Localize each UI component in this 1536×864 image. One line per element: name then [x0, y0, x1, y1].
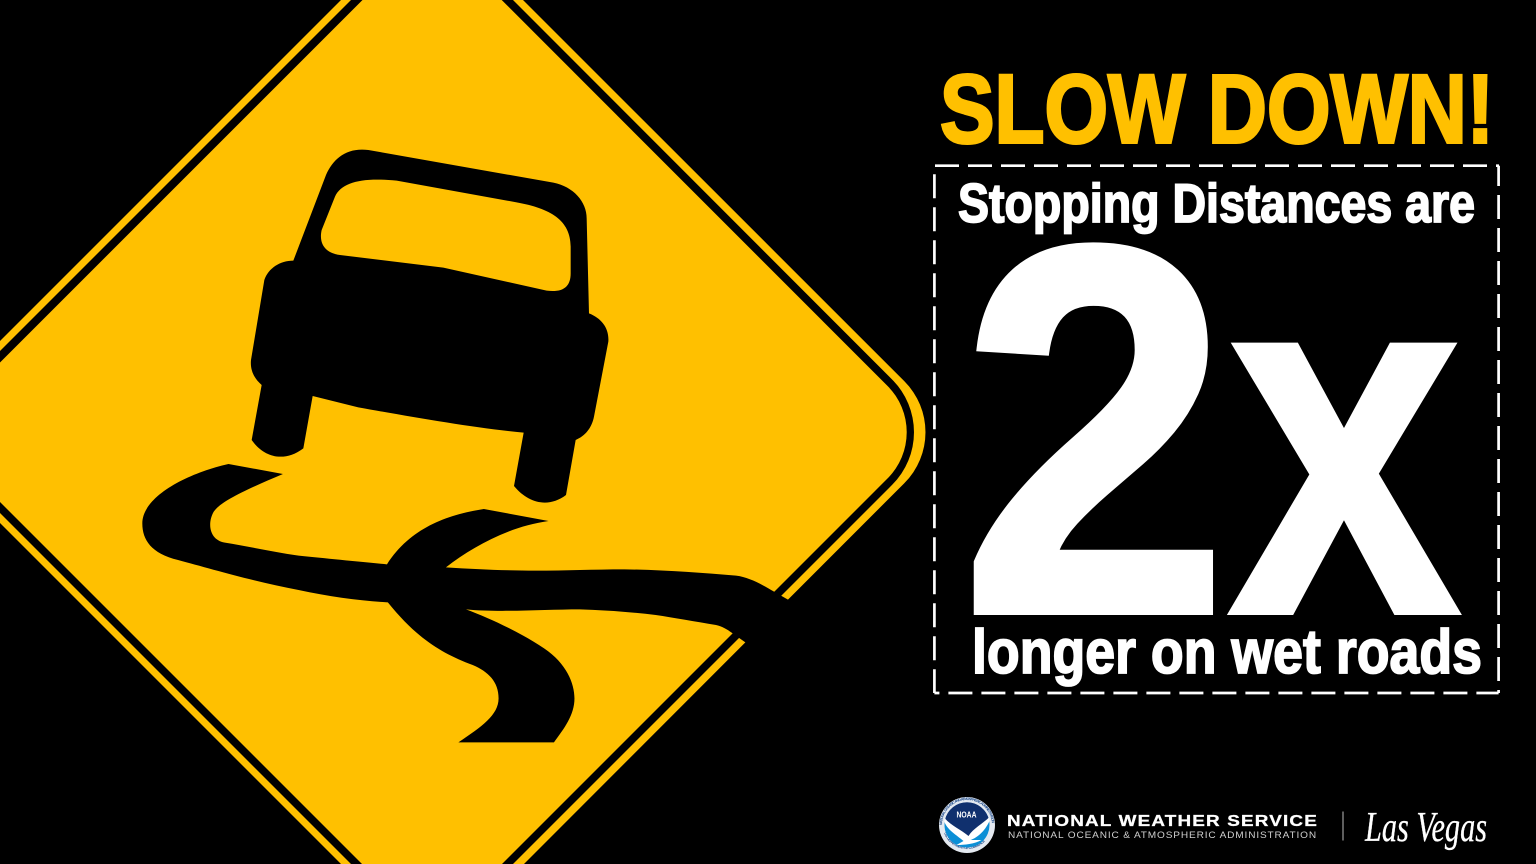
icon: NOAA seal: [939, 797, 995, 853]
icon: NOAA seal: U.S. DEPARTMENT OF COMMERCE: [944, 832, 985, 850]
icon: skidding car: [251, 150, 608, 503]
panel: dashed callout box: [934, 166, 1499, 693]
big number: 2x: 2: [960, 138, 1230, 724]
sign black keyline: [0, 0, 914, 864]
icon: skid marks on road: [142, 464, 791, 742]
icon: NOAA seal: NOAA: [956, 811, 977, 820]
footer: agency logos: [939, 797, 1487, 853]
icon: NOAA seal: NATIONAL OCEANIC AND ATMOSPHERIC ADMINISTRATION: [940, 798, 994, 825]
panel: slippery road warning sign: [0, 0, 925, 864]
footer divider: [1342, 812, 1344, 840]
sign outer border: [0, 0, 925, 864]
sign yellow face: [0, 0, 907, 864]
text: national weather service: NATIONAL WEATHER SERVICE: [1007, 813, 1318, 830]
big number: 2x: x: [1228, 156, 1464, 720]
text: national oceanic and atmospheric administration: NATIONAL OCEANIC & ATMOSPHERIC ADMINISTRATION: [1008, 829, 1317, 840]
text: las vegas office: Las Vegas: [1364, 805, 1487, 851]
big number: 2x: [960, 138, 1464, 724]
